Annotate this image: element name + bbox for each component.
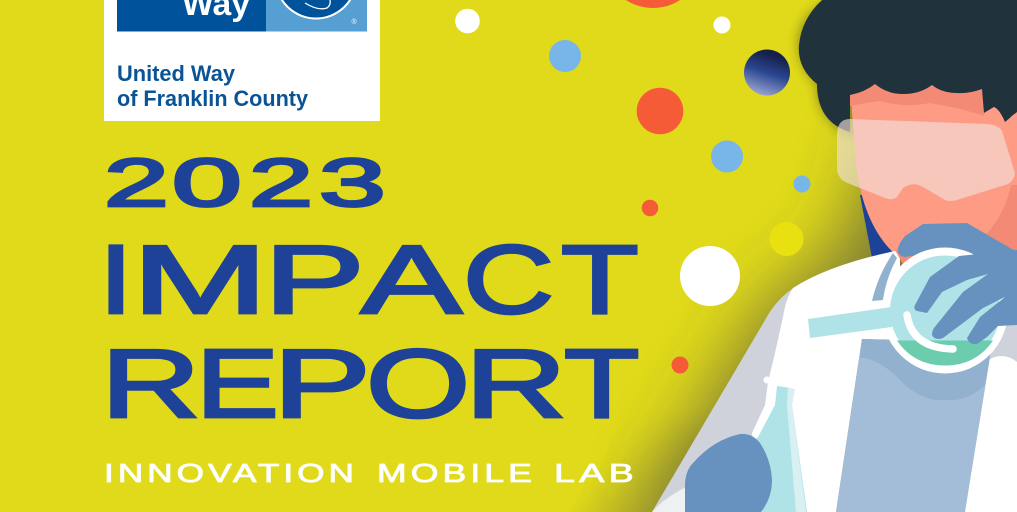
logo emblem [276, 0, 356, 18]
title report: O [366, 329, 470, 438]
gloved fingers [914, 250, 1017, 344]
title impact: P [264, 225, 365, 334]
title report [100, 329, 639, 438]
white coat [752, 250, 900, 512]
flask neck [808, 307, 892, 338]
palm shade [895, 240, 965, 268]
shirt shade [860, 339, 992, 400]
right sleeve grey [980, 322, 1017, 370]
bottle highlight [787, 387, 806, 512]
ear [1007, 112, 1017, 142]
organisation name: United Way [117, 61, 236, 86]
title year: 3 [319, 145, 386, 221]
figure shadow [580, 0, 903, 512]
title report: E [196, 329, 279, 438]
coat lower sleeve [652, 485, 690, 512]
goggles [837, 119, 1015, 201]
scientist [652, 0, 1017, 512]
title impact: C [463, 225, 554, 334]
forehead shade [850, 80, 985, 116]
logo dark panel [117, 0, 266, 32]
title year [104, 145, 386, 221]
title report: P [273, 329, 371, 438]
subtitle: LAB [554, 458, 638, 488]
lab flask [808, 248, 1008, 374]
lower gloved hand [685, 434, 772, 512]
liquid [897, 340, 993, 366]
title impact: I [99, 225, 133, 334]
flask glass [890, 256, 1000, 366]
face [850, 85, 1017, 262]
logo background [104, 0, 380, 121]
title impact: M [132, 225, 267, 334]
logo light panel [266, 0, 367, 32]
neck shade [968, 185, 1017, 275]
title impact [99, 225, 639, 334]
subtitle: MOBILE [377, 458, 536, 488]
shade strip [872, 253, 897, 301]
subtitle: INNOVATION [104, 458, 358, 488]
coat right side [955, 356, 1017, 512]
hair [799, 0, 1017, 132]
shirt panel [836, 339, 992, 512]
glove thumb [898, 223, 1017, 300]
title year: 2 [249, 145, 313, 221]
title impact: A [361, 225, 461, 334]
title report: R [465, 329, 567, 438]
logo card [104, 0, 380, 121]
flask ring [882, 248, 1008, 374]
glass highlight [907, 315, 953, 349]
bubbles [455, 0, 810, 374]
title report: T [564, 329, 639, 438]
shirt collar [860, 195, 905, 258]
conical bottle [680, 376, 807, 512]
bottle lip [764, 376, 770, 384]
title year: 0 [172, 145, 242, 221]
bottle body [680, 386, 807, 512]
organisation name: of Franklin County [117, 86, 309, 111]
sideburn [984, 107, 1015, 175]
coat back sleeve [652, 287, 830, 512]
title report: R [100, 329, 200, 438]
title year: 2 [104, 145, 169, 221]
registered mark: ® [352, 18, 358, 26]
title impact: T [561, 225, 639, 334]
